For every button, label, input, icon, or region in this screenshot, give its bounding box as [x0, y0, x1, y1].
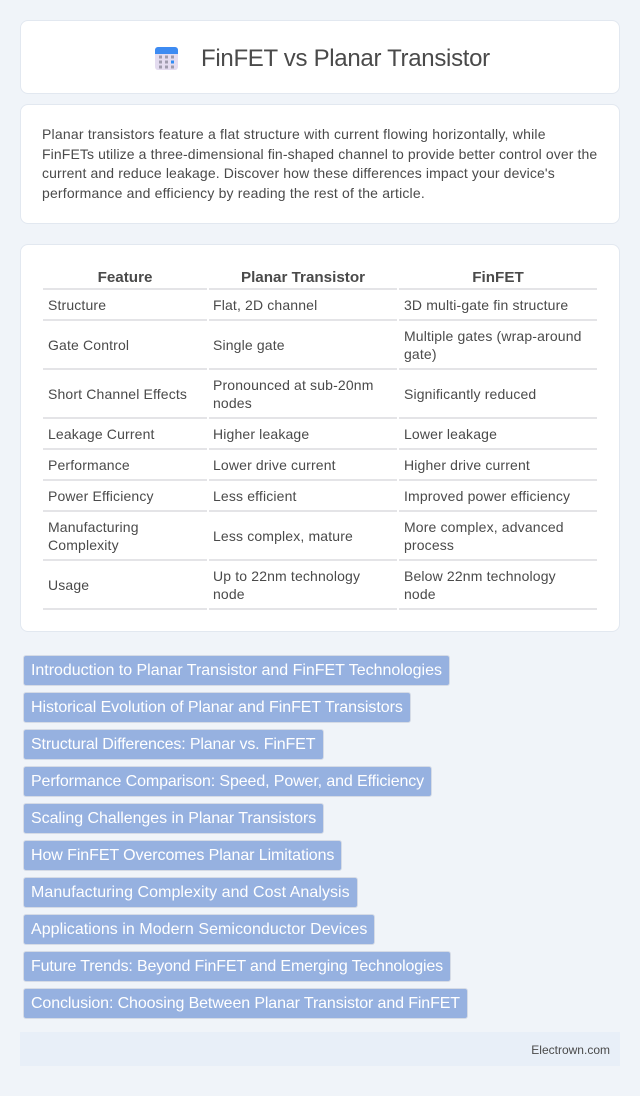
comparison table panel: process — [404, 537, 454, 553]
comparison table panel: Up to 22nm technology — [213, 568, 360, 584]
row: Manufacturing Complexity: Manufacturing — [48, 519, 139, 535]
comparison table panel: Less complex, mature — [213, 528, 353, 544]
row: Power Efficiency: Power Efficiency — [48, 488, 154, 504]
chip 7 — [23, 877, 358, 908]
chip 1: Introduction to Planar Transistor and FinFET Technologies — [31, 662, 442, 679]
icon: calendar grid — [155, 47, 178, 70]
comparison table panel: Significantly reduced — [404, 386, 536, 402]
chip 2: Historical Evolution of Planar and FinFET Transistors — [31, 699, 403, 716]
chip 5: Scaling Challenges in Planar Transistors — [31, 810, 316, 827]
chip 2 — [23, 692, 411, 723]
chip 8: Applications in Modern Semiconductor Devices — [31, 921, 367, 938]
comparison table panel: Multiple gates (wrap-around — [404, 328, 582, 344]
intro text: performance and efficiency by reading the rest of the article. — [42, 184, 425, 200]
chip 3: Structural Differences: Planar vs. FinFET — [31, 736, 315, 753]
chip 7: Manufacturing Complexity and Cost Analysis — [31, 884, 350, 901]
comparison table panel: Higher leakage — [213, 426, 309, 442]
chip 9 — [23, 951, 451, 982]
row: Performance: Performance — [48, 457, 130, 473]
chip 4 — [23, 766, 432, 797]
comparison table panel — [20, 244, 620, 632]
comparison table panel: 3D multi-gate fin structure — [404, 297, 568, 313]
comparison table panel: Below 22nm technology — [404, 568, 556, 584]
intro card — [20, 104, 620, 224]
chip 5 — [23, 803, 324, 834]
header card — [20, 20, 620, 94]
row: Manufacturing Complexity — [48, 519, 139, 553]
intro text: current and reduce leakage. Discover how these differences impact your device's — [42, 165, 555, 181]
comparison table panel: Less efficient — [213, 488, 297, 504]
table header: Planar Transistor: Planar Transistor — [241, 269, 365, 286]
chip 1 — [23, 655, 450, 686]
row: Leakage Current: Leakage Current — [48, 426, 155, 442]
comparison table panel: node — [404, 586, 436, 602]
chip 10 — [23, 988, 468, 1019]
footer bar — [20, 1032, 620, 1066]
row: Structure: Structure — [48, 297, 106, 313]
comparison table panel: node — [213, 586, 245, 602]
comparison table panel: Flat, 2D channel — [213, 297, 317, 313]
chip 10: Conclusion: Choosing Between Planar Transistor and FinFET — [31, 995, 460, 1012]
comparison table panel: Single gate — [213, 337, 285, 353]
intro text: Planar transistors feature a flat structure with current flowing horizontally, while — [42, 126, 546, 142]
section link chips — [23, 655, 468, 1019]
row: Short Channel Effects: Short Channel Effects — [48, 386, 187, 402]
comparison table panel: Higher drive current — [404, 457, 530, 473]
footer credit: Electrown.com — [531, 1043, 610, 1057]
intro text — [42, 126, 597, 201]
comparison table panel: Lower leakage — [404, 426, 497, 442]
table header: FinFET: FinFET — [472, 269, 524, 286]
row: Gate Control: Gate Control — [48, 337, 129, 353]
comparison table panel: Pronounced at sub-20nm — [213, 377, 374, 393]
intro text: FinFETs utilize a three-dimensional fin-shaped channel to provide better control over the — [42, 146, 597, 162]
chip 3 — [23, 729, 324, 760]
comparison table panel: nodes — [213, 395, 252, 411]
comparison table panel: Improved power efficiency — [404, 488, 570, 504]
chip 8 — [23, 914, 375, 945]
chip 6: How FinFET Overcomes Planar Limitations — [31, 847, 334, 864]
row: Usage: Usage — [48, 577, 89, 593]
chip 4: Performance Comparison: Speed, Power, and Efficiency — [31, 773, 424, 790]
chip 6 — [23, 840, 342, 871]
comparison table panel: gate) — [404, 346, 437, 362]
comparison table panel: More complex, advanced — [404, 519, 564, 535]
comparison table panel: Lower drive current — [213, 457, 336, 473]
row: Manufacturing Complexity: Complexity — [48, 537, 119, 553]
chip 9: Future Trends: Beyond FinFET and Emerging Technologies — [31, 958, 443, 975]
table header: Feature: Feature — [98, 269, 152, 286]
title: FinFET vs Planar Transistor — [201, 45, 490, 72]
